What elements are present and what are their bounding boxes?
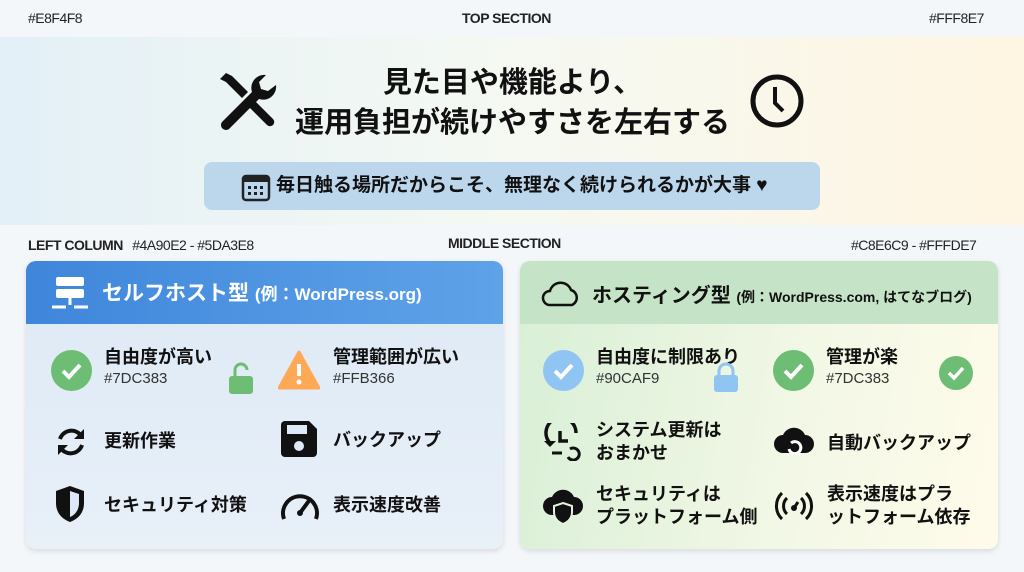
- item: freedom high: #7DC383: [104, 370, 167, 387]
- item: easy management: [773, 347, 973, 391]
- item: auto backup: 自動バックアップ: [827, 433, 971, 453]
- item: platform security: プラットフォーム側: [596, 507, 757, 527]
- item: speed: 表示速度改善: [333, 495, 441, 515]
- panel: hosting: [520, 261, 998, 549]
- item: security: セキュリティ対策: [104, 495, 247, 515]
- title: 見た目や機能より、: [383, 67, 642, 99]
- label: top section: TOP SECTION: [462, 10, 551, 26]
- item: platform speed: 表示速度はプラ: [827, 484, 953, 504]
- label: right colors: #C8E6C9 - #FFFDE7: [851, 237, 976, 253]
- icon: calendar: [242, 174, 270, 202]
- panel header: [26, 261, 503, 324]
- icon: clock: [750, 74, 804, 128]
- panel header: セルフホスト型 (例：WordPress.org): [102, 282, 422, 305]
- icon: tools: [220, 73, 276, 130]
- icon: cloud: [542, 282, 578, 306]
- item: freedom limited: #90CAF9: [596, 370, 659, 387]
- item: freedom limited: [543, 347, 740, 392]
- label: top-left color: #E8F4F8: [28, 10, 82, 26]
- label: middle section: MIDDLE SECTION: [448, 235, 561, 251]
- item: system updates: [544, 420, 721, 463]
- item: updates: 更新作業: [104, 431, 176, 451]
- item: platform security: セキュリティは: [596, 484, 721, 504]
- panel header: [520, 261, 998, 324]
- title: [295, 67, 730, 139]
- item: management wide: [278, 347, 459, 390]
- panel: self-hosted: [26, 261, 503, 549]
- subtitle pill: [204, 162, 820, 210]
- item: freedom limited: 自由度に制限あり: [596, 347, 740, 367]
- item: platform speed: ットフォーム依存: [827, 507, 970, 527]
- item: easy management: #7DC383: [826, 370, 889, 387]
- item: platform speed: [774, 484, 970, 527]
- item: freedom high: [51, 347, 253, 394]
- item: backup: バックアップ: [333, 430, 441, 450]
- item: easy management: 管理が楽: [826, 347, 898, 367]
- label: left column: LEFT COLUMN #4A90E2 - #5DA3E8: [28, 237, 254, 253]
- item: system updates: システム更新は: [596, 420, 721, 440]
- top band: [0, 37, 1024, 225]
- item: management wide: 管理範囲が広い: [333, 347, 459, 367]
- subtitle pill: 毎日触る場所だからこそ、無理なく続けられるかが大事 ♥: [276, 175, 768, 196]
- icon: server: [52, 277, 88, 308]
- panel header: ホスティング型 (例：WordPress.com, はてなブログ): [592, 285, 972, 307]
- item: security: [56, 486, 247, 522]
- item: freedom high: 自由度が高い: [104, 347, 212, 367]
- item: system updates: おまかせ: [596, 443, 668, 463]
- item: auto backup: [774, 428, 971, 455]
- item: management wide: #FFB366: [333, 370, 395, 387]
- item: speed: [281, 494, 441, 520]
- title: 運用負担が続けやすさを左右する: [295, 107, 730, 139]
- item: backup: [281, 421, 441, 457]
- label: top-right color: #FFF8E7: [929, 10, 984, 26]
- item: platform security: [543, 484, 757, 527]
- item: updates: [58, 428, 176, 456]
